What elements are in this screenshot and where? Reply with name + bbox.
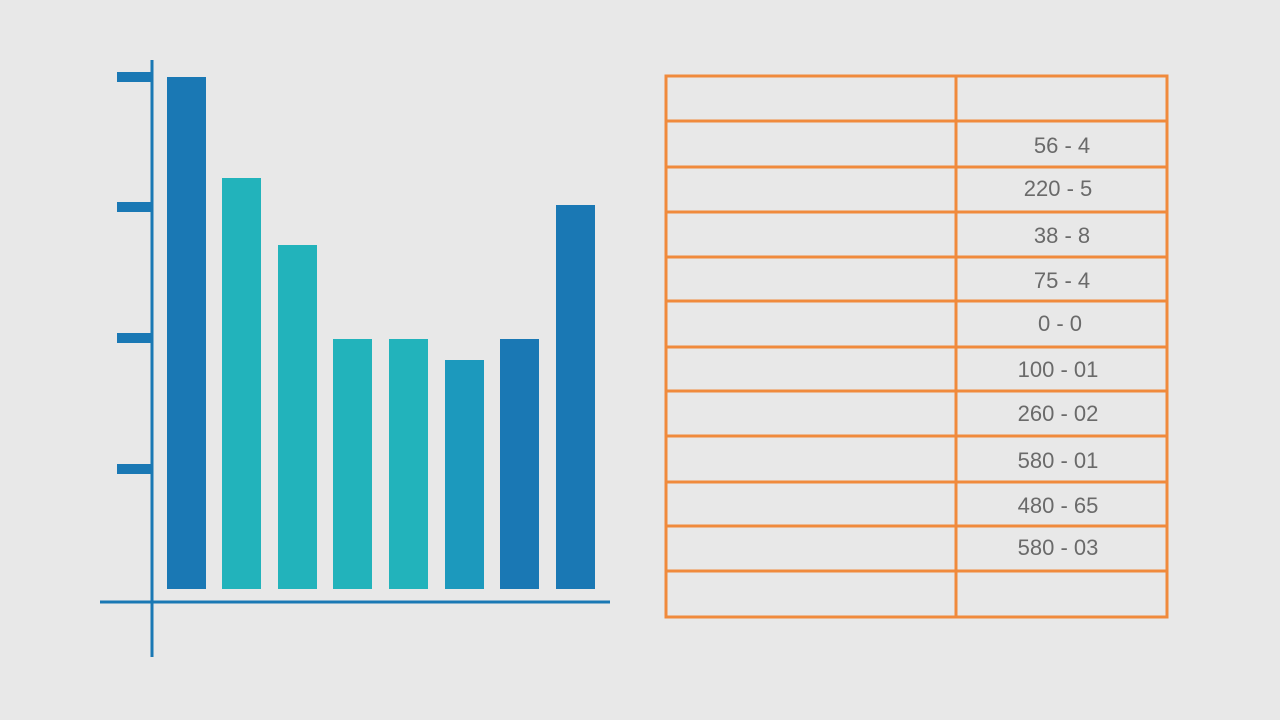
table values: 220 - 5 — [1024, 176, 1092, 201]
axis ticks — [117, 72, 152, 474]
axes — [100, 60, 610, 657]
table values: 480 - 65 — [1018, 493, 1098, 518]
table values: 100 - 01 — [1018, 357, 1098, 382]
table values: 580 - 03 — [1018, 535, 1098, 560]
table values: 260 - 02 — [1018, 401, 1098, 426]
table values: 75 - 4 — [1034, 268, 1090, 293]
bars — [167, 77, 595, 589]
table values — [1018, 133, 1098, 560]
table values: 580 - 01 — [1018, 448, 1098, 473]
table values: 38 - 8 — [1034, 223, 1090, 248]
table values: 56 - 4 — [1034, 133, 1090, 158]
table values: 0 - 0 — [1038, 311, 1082, 336]
